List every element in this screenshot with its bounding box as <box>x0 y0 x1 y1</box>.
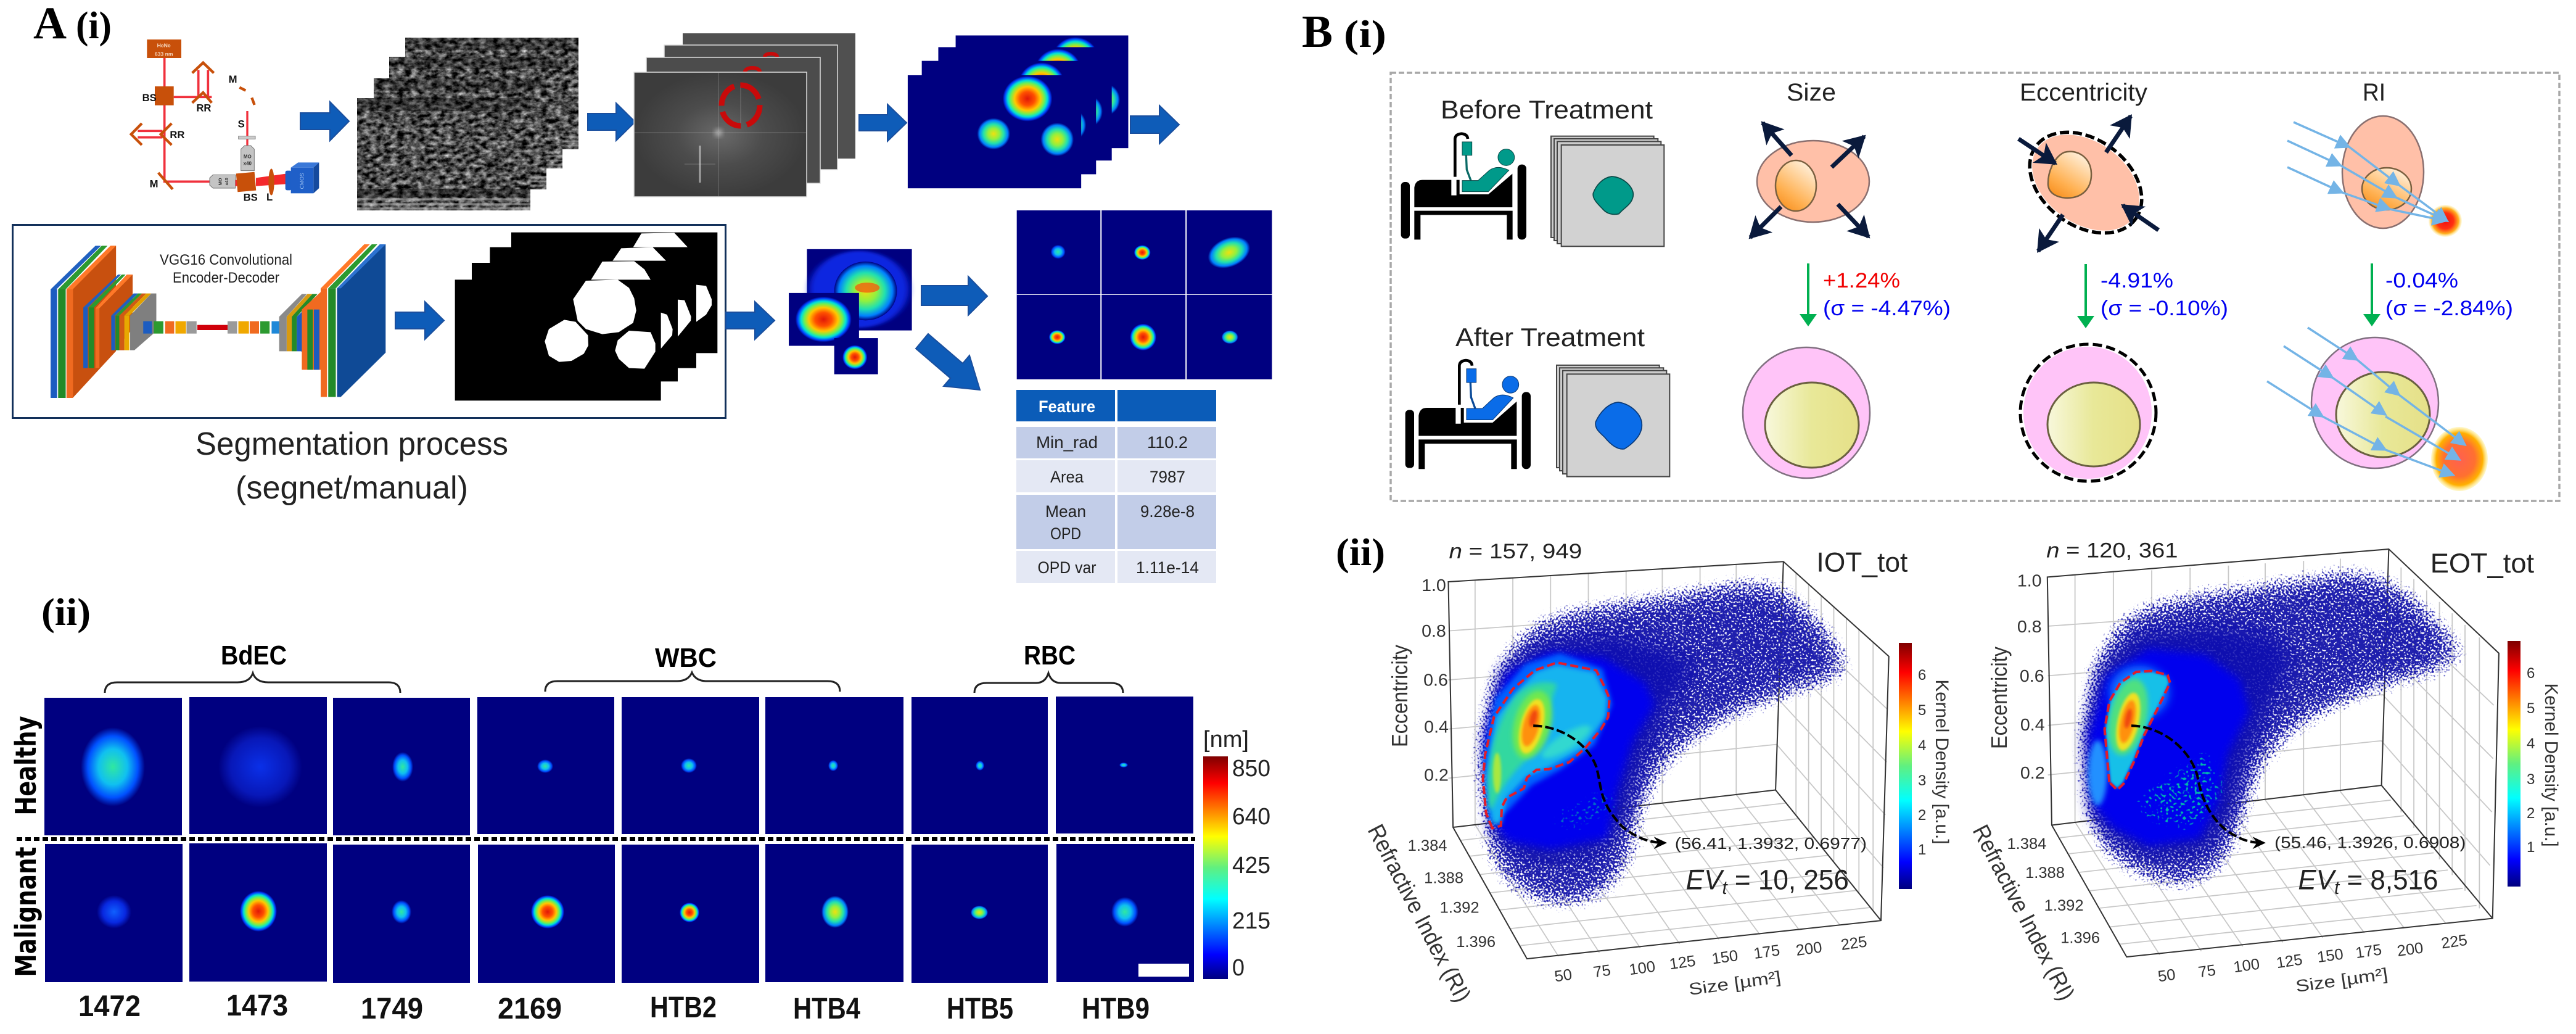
icon: image stack after treatment <box>1557 365 1669 477</box>
segmentation process caption line two: (segnet/manual) <box>236 470 468 506</box>
optical setup diagram: M <box>150 178 158 189</box>
chart axis tick labels: Size [µm²] <box>2294 964 2389 996</box>
cell: refractive index before <box>2287 116 2462 237</box>
cell line labels: 1473 <box>226 990 288 1022</box>
after treatment heading: After Treatment <box>1455 323 1645 352</box>
feature table: Min_rad <box>1036 433 1098 452</box>
change arrow: refractive index <box>2371 263 2373 324</box>
panel: segmentation network box <box>12 225 725 418</box>
group label RBC: RBC <box>1024 640 1076 671</box>
refractive index change values: (σ = -2.84%) <box>2385 297 2513 320</box>
group label BdEC: BdEC <box>221 640 287 671</box>
segmentation mask stack <box>455 233 717 400</box>
annotation values: EV <box>1686 864 1724 896</box>
refractive index axis label: Refractive Index (RI) <box>1967 821 2080 1005</box>
chart axis tick labels: 0.2 <box>1424 766 1449 785</box>
annotation values: IOT_tot <box>1816 548 1908 577</box>
panel B (ii) label: (ii) <box>1336 532 1385 574</box>
annotation values: = 10, 256 <box>1727 864 1849 896</box>
feature table: Feature <box>1039 397 1095 416</box>
cell line labels: HTB9 <box>1082 993 1150 1025</box>
colorbar nm: 850 <box>1232 756 1270 782</box>
annotation values: (56.41, 1.3932, 0.6977) <box>1675 834 1867 853</box>
network label: VGG16 Convolutional <box>160 252 292 268</box>
panel A (i) label: (i) <box>76 5 112 47</box>
chart axis tick labels: 0.4 <box>2020 715 2045 735</box>
colorbar nm <box>1203 727 1270 981</box>
arrowhead <box>1654 837 1667 849</box>
optical setup diagram: 633 nm <box>155 51 173 57</box>
feature table: Area <box>1050 468 1084 486</box>
panel A (ii) label: (ii) <box>41 592 91 634</box>
chart axis tick labels: 175 <box>1753 942 1781 962</box>
arrowhead <box>2252 837 2266 849</box>
chart axis tick labels: 100 <box>2232 956 2261 976</box>
chart: EOT_tot 3D scatter <box>2007 539 2535 996</box>
arrow <box>859 104 907 141</box>
cell: size after <box>1743 347 1870 478</box>
feature table <box>1016 390 1216 583</box>
colorbar kernel density: 2 <box>1918 807 1926 824</box>
annotation values: t <box>1722 877 1728 898</box>
segmentation process caption: Segmentation process <box>195 426 508 462</box>
optical setup diagram: HeNe <box>157 43 171 49</box>
chart axis tick labels: 1.0 <box>1422 576 1446 595</box>
cell line labels: HTB5 <box>947 993 1013 1025</box>
scatter cloud <box>1470 574 1869 916</box>
size heading: Size <box>1787 79 1836 106</box>
size change values: (σ = -4.47%) <box>1823 297 1951 320</box>
change arrow: size <box>1807 263 1809 324</box>
annotation values: n = 120, 361 <box>2046 539 2178 563</box>
network label line two: Encoder-Decoder <box>173 270 279 286</box>
colorbar kernel density: 1 <box>1918 842 1926 858</box>
optical setup diagram: CMOS <box>299 173 305 189</box>
feature table: Mean <box>1045 502 1086 521</box>
chart axis tick labels: 125 <box>1668 953 1697 973</box>
healthy cell tiles <box>44 697 1193 835</box>
chart axis tick labels: 225 <box>1840 933 1868 954</box>
cell line labels: 1749 <box>361 993 423 1025</box>
scale bar <box>1138 964 1189 977</box>
panel B (i) label: (i) <box>1344 14 1386 56</box>
chart axis tick labels: 225 <box>2440 932 2469 952</box>
eccentricity change values: (σ = -0.10%) <box>2101 297 2228 320</box>
size change values <box>1823 269 1951 320</box>
panel B label: B <box>1302 7 1333 57</box>
colorbar kernel density: 5 <box>1918 702 1926 719</box>
colorbar kernel density: 4 <box>2527 735 2535 752</box>
colorbar nm: 640 <box>1232 804 1270 830</box>
optical setup diagram: RR <box>170 129 184 141</box>
feature table: 7987 <box>1150 468 1185 486</box>
chart axis tick labels: 150 <box>1711 947 1739 968</box>
optical setup diagram: MO <box>217 178 223 185</box>
annotation values: (55.46, 1.3926, 0.6908) <box>2274 833 2466 852</box>
chart: IOT_tot 3D scatter <box>1408 540 1908 999</box>
annotation values <box>2046 539 2535 898</box>
chart axis tick labels: 200 <box>2396 940 2424 960</box>
chart axis tick labels: 150 <box>2316 946 2345 966</box>
refractive index axis label: Refractive Index (RI) <box>1362 821 1475 1006</box>
arrow <box>726 302 775 339</box>
single cell tile grid <box>1017 210 1272 379</box>
annotation values: EV <box>2298 864 2337 896</box>
change arrow: eccentricity <box>2084 264 2087 326</box>
cell line labels: HTB2 <box>650 991 717 1024</box>
panel: treatment comparison <box>1391 73 2559 501</box>
chart axis tick labels: 0.4 <box>1424 717 1449 737</box>
annotation values: t <box>2334 877 2340 898</box>
group braces <box>105 672 1123 693</box>
optical setup diagram: S <box>238 118 245 130</box>
chart axis tick labels: 1.388 <box>1424 870 1463 887</box>
scatter cloud <box>2073 561 2483 897</box>
feature table: 1.11e-14 <box>1136 558 1199 577</box>
cell: refractive index after <box>2267 328 2488 491</box>
chart axis tick labels: 0.8 <box>2017 617 2042 637</box>
colorbar kernel density: Kernel Density [a.u.] <box>1932 680 1952 844</box>
phase map image stack <box>908 35 1128 188</box>
colorbar nm: 425 <box>1232 853 1270 879</box>
colorbar kernel density: Kernel Density [a.u.] <box>2541 684 2561 846</box>
annotation values: = 8,516 <box>2339 864 2438 896</box>
arrow to feature table <box>916 334 980 390</box>
before treatment heading: Before Treatment <box>1441 95 1653 124</box>
refractive index change values: -0.04% <box>2385 269 2458 292</box>
chart axis tick labels: 1.0 <box>2017 571 2042 590</box>
optical setup diagram: x40 <box>224 178 229 185</box>
chart axis tick labels: 100 <box>1628 958 1656 978</box>
chart axis tick labels: 75 <box>2197 962 2217 981</box>
malignant cell tiles <box>45 843 1194 983</box>
optical setup diagram: RR <box>196 102 211 114</box>
arrow <box>395 302 444 339</box>
chart axis tick labels: 1.396 <box>2060 930 2100 946</box>
arrow <box>588 103 635 141</box>
feature table: 9.28e-8 <box>1140 502 1195 521</box>
feature table: 110.2 <box>1147 433 1188 452</box>
colorbar kernel density: 2 <box>2527 805 2535 822</box>
chart axis tick labels <box>1408 576 1868 999</box>
row separator <box>17 837 1195 841</box>
icon: patient after treatment <box>1405 360 1531 469</box>
feature table: OPD var <box>1037 558 1097 577</box>
red dashed contour <box>1483 663 1610 828</box>
cell line labels: HTB4 <box>793 993 860 1025</box>
optical setup diagram: BS <box>142 92 157 104</box>
eccentricity axis label: Eccentricity <box>1387 645 1412 747</box>
chart axis tick labels: 1.384 <box>2007 835 2046 853</box>
eccentricity heading: Eccentricity <box>2020 79 2147 106</box>
annotation values: EOT_tot <box>2430 548 2535 579</box>
chart axis tick labels: 50 <box>2157 966 2176 985</box>
chart axis tick labels: 50 <box>1553 966 1573 985</box>
eccentricity change values <box>2101 269 2228 320</box>
optical setup diagram: x40 <box>244 160 252 166</box>
colorbar nm: 215 <box>1232 908 1270 934</box>
cropped cell images <box>789 249 912 374</box>
colorbar nm: [nm] <box>1203 727 1249 753</box>
chart axis tick labels: 75 <box>1592 962 1612 981</box>
cell line labels <box>78 990 1150 1025</box>
feature table: OPD <box>1050 524 1081 543</box>
optical setup diagram <box>131 39 319 204</box>
cell: eccentricity before <box>2010 112 2161 254</box>
optical setup diagram: L <box>266 191 273 203</box>
chart axis tick labels: 0.8 <box>1422 621 1446 641</box>
arrow to cell tiles <box>921 276 987 315</box>
black dashed trajectory arrow <box>2131 726 2260 843</box>
chart axis tick labels: 125 <box>2275 951 2303 972</box>
colorbar kernel density: 3 <box>2527 771 2535 788</box>
chart axis tick labels: 1.392 <box>1440 900 1479 916</box>
chart axis tick labels: 200 <box>1795 939 1823 959</box>
annotation values <box>1449 540 1908 898</box>
group label WBC: WBC <box>655 643 717 673</box>
hologram image stack <box>357 38 578 210</box>
colorbar kernel density: 1 <box>2527 839 2535 856</box>
RI heading: RI <box>2363 79 2385 106</box>
red dashed circle <box>722 85 760 126</box>
optical setup diagram: M <box>229 73 237 85</box>
colorbar kernel density: 5 <box>2527 700 2535 717</box>
fourier transform image stack <box>634 33 855 197</box>
colorbar kernel density: 6 <box>2527 665 2535 682</box>
cell line labels: 2169 <box>498 993 562 1025</box>
icon: image stack before treatment <box>1551 136 1664 246</box>
eccentricity change values: -4.91% <box>2101 269 2173 292</box>
malignant row label: Malignant <box>9 846 43 977</box>
optical setup diagram: BS <box>244 192 258 204</box>
chart axis tick labels: 1.396 <box>1456 933 1496 951</box>
arrow <box>1130 105 1179 144</box>
chart axis tick labels <box>2007 571 2469 996</box>
annotation values: n = 157, 949 <box>1449 540 1582 563</box>
eccentricity axis label: Eccentricity <box>1986 647 2012 749</box>
encoder-decoder network <box>51 244 385 398</box>
colorbar kernel density: 4 <box>1918 737 1926 754</box>
chart axis tick labels: 1.388 <box>2025 864 2065 882</box>
icon: patient before treatment <box>1401 134 1526 239</box>
chart axis tick labels: Size [µm²] <box>1687 967 1782 999</box>
healthy row label: Healthy <box>9 716 43 816</box>
cell: size before <box>1750 123 1869 238</box>
chart axis tick labels: 1.384 <box>1408 837 1447 854</box>
colorbar kernel density <box>1899 643 1952 889</box>
size change values: +1.24% <box>1823 269 1900 292</box>
cell: eccentricity after <box>2020 344 2156 481</box>
black dashed trajectory arrow <box>1533 726 1661 843</box>
chart axis tick labels: 1.392 <box>2044 897 2084 914</box>
colorbar kernel density: 6 <box>1918 667 1926 684</box>
chart axis tick labels: 175 <box>2355 941 2383 962</box>
chart axis tick labels: 0.6 <box>2020 666 2044 686</box>
chart axis tick labels: 0.6 <box>1423 671 1448 690</box>
refractive index change values <box>2385 269 2513 320</box>
red dashed contour <box>2105 671 2170 790</box>
colorbar kernel density <box>2508 641 2561 887</box>
colorbar kernel density: 3 <box>1918 772 1926 789</box>
optical setup diagram: MO <box>244 154 252 160</box>
chart axis tick labels: 0.2 <box>2020 763 2045 783</box>
arrow <box>300 102 349 141</box>
colorbar nm: 0 <box>1232 955 1245 981</box>
cell line labels: 1472 <box>78 990 141 1023</box>
